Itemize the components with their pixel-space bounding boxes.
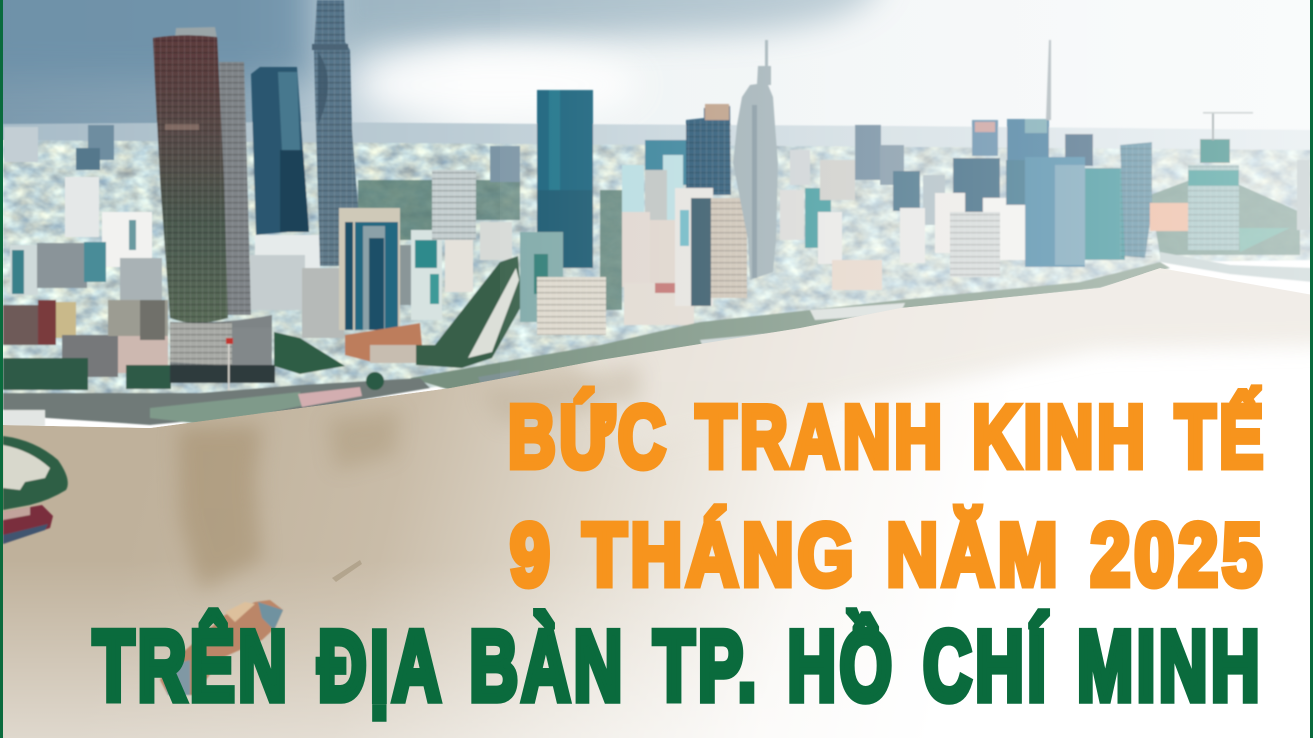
- sky: [0, 0, 1313, 140]
- teal low-rise: [520, 232, 606, 335]
- white block behind towers: [255, 235, 320, 270]
- mid-ground city texture: [3, 140, 1313, 420]
- white and dark stripe tower: [675, 188, 747, 306]
- moored boats: [478, 303, 905, 386]
- podium of tower: [170, 315, 275, 404]
- teal and white block: [400, 230, 442, 320]
- red boat: [3, 505, 53, 544]
- beige tower with blue glass: [339, 208, 400, 330]
- left embankment road: [3, 372, 430, 426]
- grey block: [302, 268, 344, 338]
- side border right: [1310, 0, 1313, 738]
- city skyline: [3, 0, 1313, 426]
- boulevard: [468, 268, 519, 358]
- river: [3, 240, 1313, 738]
- trees along boulevard: [416, 256, 522, 368]
- barge: [160, 600, 283, 695]
- riverbank green strip: [410, 262, 1170, 390]
- Vietcombank tower: [733, 40, 778, 280]
- distant haze band: [3, 122, 1313, 220]
- pale upper river band: [575, 268, 1310, 428]
- dark teal tower: [537, 90, 593, 268]
- glass office block with windows: [432, 146, 520, 292]
- antenna mast: [1046, 40, 1051, 120]
- tower: skeleton high-rise: [219, 62, 251, 315]
- Bitexco tower: [312, 0, 358, 266]
- central tall cluster: [622, 140, 695, 325]
- glass cluster: [1006, 119, 1152, 267]
- right tower with crane: [1150, 112, 1310, 252]
- far left buildings: [4, 127, 38, 162]
- green trees behind the city: [358, 180, 1300, 310]
- dark blue tower: [251, 67, 309, 235]
- water reflections: [178, 425, 262, 590]
- tower: Saigon One main cylinder: [153, 27, 228, 323]
- trees near hall: [274, 332, 345, 374]
- right of centre low towers: [780, 120, 1029, 290]
- river island left: [3, 436, 68, 510]
- side border left: [0, 0, 3, 738]
- orange roof hall: [345, 323, 422, 362]
- navy tower: [686, 104, 731, 195]
- waterfront bridge right: [1160, 252, 1313, 282]
- white wash over right side: [500, 0, 1313, 378]
